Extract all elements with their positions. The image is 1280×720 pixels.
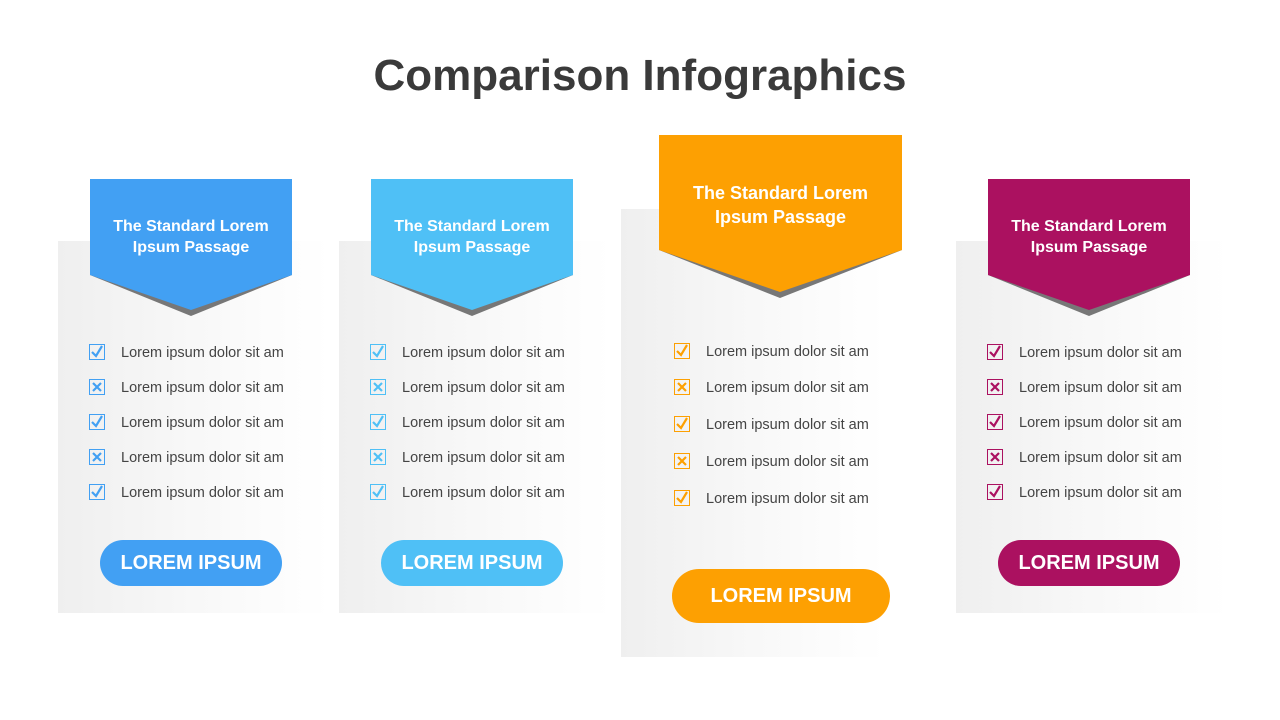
banner 2: Ipsum Passage [414,239,530,256]
checklist 3: Lorem ipsum dolor sit am [706,454,869,470]
button 2 [381,540,563,586]
banner 1: The Standard Lorem [113,218,269,235]
button 4 [998,540,1180,586]
checklist 4 [987,344,1182,501]
checklist 1: Lorem ipsum dolor sit am [121,450,284,466]
checklist 3: Lorem ipsum dolor sit am [706,344,869,360]
banner 3: Ipsum Passage [715,207,846,227]
panel: card 3 (featured) [621,135,902,657]
checklist 2: Lorem ipsum dolor sit am [402,380,565,396]
banner 1 [90,179,292,316]
banner 4 [988,179,1190,316]
checklist 2: Lorem ipsum dolor sit am [402,485,565,501]
button 4: LOREM IPSUM [1018,552,1160,574]
checklist 4: Lorem ipsum dolor sit am [1019,450,1182,466]
checklist 1: Lorem ipsum dolor sit am [121,485,284,501]
checklist 1: Lorem ipsum dolor sit am [121,345,284,361]
banner 4: Ipsum Passage [1031,239,1147,256]
checklist 4: Lorem ipsum dolor sit am [1019,485,1182,501]
button 2: LOREM IPSUM [401,552,543,574]
checklist 4: Lorem ipsum dolor sit am [1019,380,1182,396]
checklist 3 [674,343,869,507]
banner 3: The Standard Lorem [693,183,868,203]
checklist 2: Lorem ipsum dolor sit am [402,450,565,466]
banner 2 [371,179,573,316]
checklist 1: Lorem ipsum dolor sit am [121,380,284,396]
panel: card 2 [339,179,573,613]
checklist 3: Lorem ipsum dolor sit am [706,491,869,507]
banner 1: Ipsum Passage [133,239,249,256]
title: Comparison Infographics [374,51,906,100]
banner 4: The Standard Lorem [1011,218,1167,235]
button 1: LOREM IPSUM [120,552,262,574]
banner 2: The Standard Lorem [394,218,550,235]
checklist 1: Lorem ipsum dolor sit am [121,415,284,431]
button 3 [672,569,890,623]
checklist 2: Lorem ipsum dolor sit am [402,345,565,361]
panel: card 4 [956,179,1190,613]
checklist 3: Lorem ipsum dolor sit am [706,380,869,396]
panel: card 1 [58,179,292,613]
button 3: LOREM IPSUM [710,585,852,607]
button 1 [100,540,282,586]
checklist 4: Lorem ipsum dolor sit am [1019,345,1182,361]
banner 3 [659,135,902,298]
checklist 3: Lorem ipsum dolor sit am [706,417,869,433]
checklist 2 [370,344,565,501]
checklist 4: Lorem ipsum dolor sit am [1019,415,1182,431]
checklist 2: Lorem ipsum dolor sit am [402,415,565,431]
checklist 1 [89,344,284,501]
